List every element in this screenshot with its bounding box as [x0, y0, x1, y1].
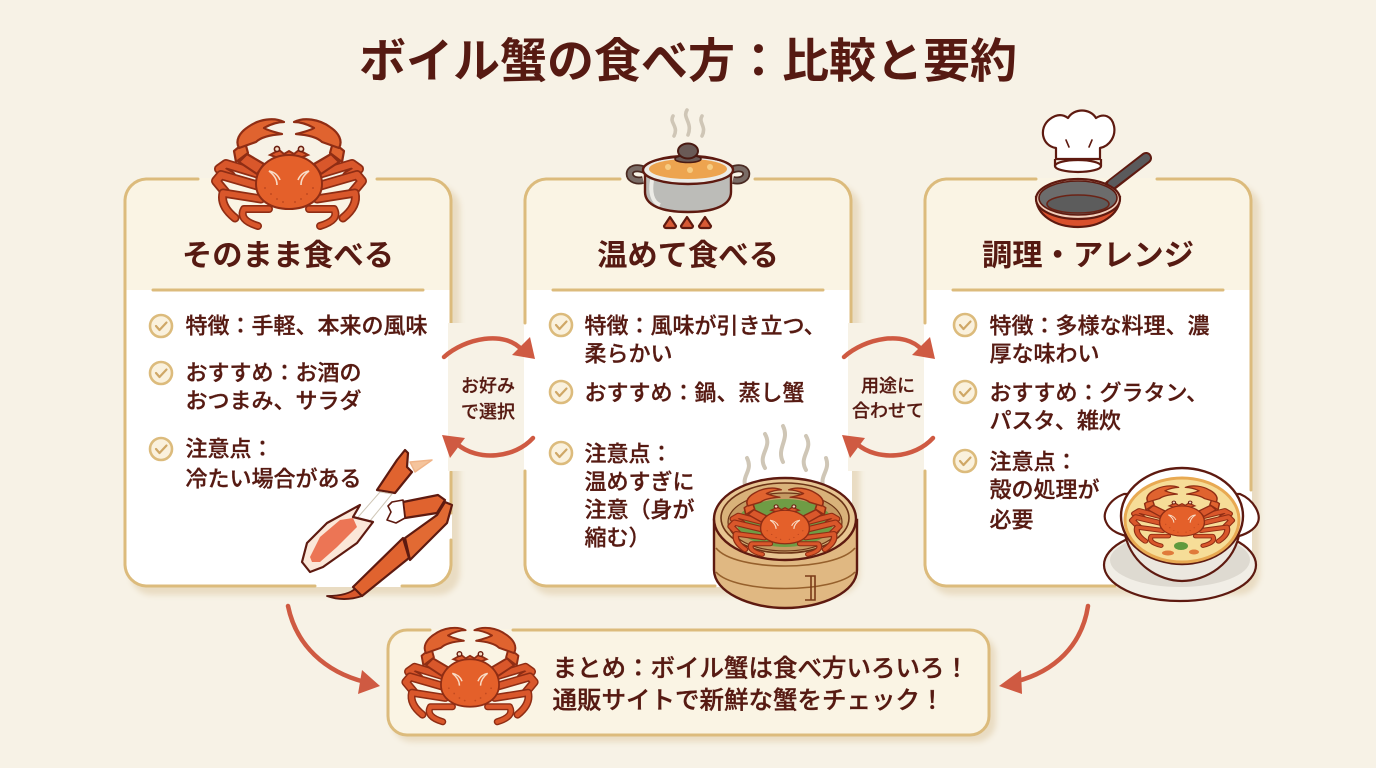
arrow: right panel to summary — [999, 606, 1088, 694]
recommendation item: おすすめ：グラタン、 — [990, 380, 1208, 406]
caution item — [550, 442, 695, 550]
heading: 温めて食べる — [597, 238, 779, 272]
recommendation item: おつまみ、サラダ — [186, 388, 362, 414]
summary text: 通販サイトで新鮮な蟹をチェック！ — [552, 686, 944, 714]
label: 用途に合わせて — [852, 376, 924, 421]
recommendation item: パスタ、雑炊 — [990, 408, 1121, 434]
caution item: 注意点： — [584, 442, 673, 466]
panel: summary — [387, 628, 996, 742]
recommendation item — [150, 360, 362, 414]
icon: crab — [406, 628, 534, 722]
caution item: 注意点： — [186, 436, 274, 462]
label: 用途に合わせて: 用途に — [861, 376, 915, 396]
icon: crab — [216, 119, 362, 226]
caution item: 注意点： — [990, 450, 1078, 474]
illustration: crab leg — [302, 450, 452, 599]
feature item: 厚な味わい — [990, 342, 1100, 366]
arrow: left panel to summary — [288, 606, 380, 694]
feature item: 特徴：手軽、本来の風味 — [186, 314, 428, 338]
label: お好みで選択: お好み — [461, 376, 515, 396]
panel: 温めて食べる — [524, 110, 930, 608]
panel: そのまま食べる — [124, 119, 530, 599]
heading: 調理・アレンジ — [982, 240, 1194, 272]
caution item: 冷たい場合がある — [186, 466, 362, 492]
caution item — [150, 436, 362, 492]
recommendation item — [954, 380, 1208, 434]
label: お好みで選択: で選択 — [461, 402, 515, 422]
panel: 調理・アレンジ — [924, 110, 1260, 601]
icon: chef hat and frying pan — [1036, 110, 1146, 227]
feature item — [550, 314, 826, 366]
arrows: preference choice — [442, 337, 535, 458]
illustration: crab gratin — [1104, 468, 1259, 601]
label: お好みで選択 — [461, 376, 515, 422]
illustration: bamboo steamer with crab — [714, 426, 857, 608]
caution item: 縮む） — [584, 526, 651, 550]
title: ボイル蟹の食べ方：比較と要約 — [359, 34, 1017, 88]
caution item — [954, 450, 1100, 532]
heading: そのまま食べる — [182, 238, 394, 272]
feature item: 柔らかい — [584, 342, 673, 366]
feature item — [954, 314, 1210, 366]
caution item: 注意（身が — [584, 498, 695, 522]
arrows: purpose choice — [842, 337, 935, 458]
feature item: 特徴：多様な料理、濃 — [990, 314, 1210, 338]
label: 用途に合わせて: 合わせて — [852, 401, 924, 421]
recommendation item: おすすめ：お酒の — [186, 360, 362, 386]
summary text — [552, 654, 969, 714]
caution item: 温めすぎに — [584, 470, 695, 494]
summary text: まとめ：ボイル蟹は食べ方いろいろ！ — [552, 654, 969, 682]
recommendation item: おすすめ：鍋、蒸し蟹 — [584, 380, 805, 406]
icon: pot on flames — [630, 110, 746, 228]
caution item: 殻の処理が — [990, 478, 1100, 502]
caution item: 必要 — [990, 508, 1034, 532]
feature item: 特徴：風味が引き立つ、 — [584, 314, 826, 338]
